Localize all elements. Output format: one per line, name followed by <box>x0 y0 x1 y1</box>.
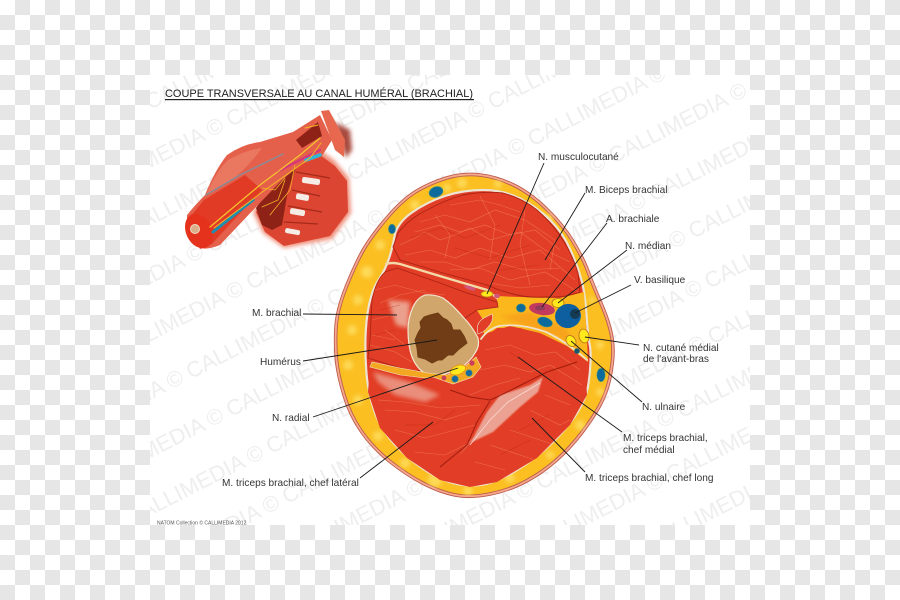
fascia band between biceps and brachial <box>386 263 497 298</box>
watermark: CALLIMEDIA © CALLIMEDIA © <box>521 395 808 558</box>
deep fascia <box>365 190 591 486</box>
title: COUPE TRANSVERSALE AU CANAL HUMÉRAL (BRACHIAL) <box>165 87 473 100</box>
muscle: biceps brachial <box>393 192 580 297</box>
label: N. ulnaire: N. ulnaire <box>642 402 686 413</box>
vessels and nerves <box>206 125 321 232</box>
label: N. musculocutané: N. musculocutané <box>538 152 619 163</box>
credit line: NATOM Collection © CALLIMEDIA 2012 <box>157 520 247 526</box>
watermark: CALLIMEDIA © CALLIMEDIA © CALLIMEDIA © CALLIMEDIA © CALLIMEDIA © <box>121 152 831 530</box>
watermark: CALLIMEDIA © CALLIMEDIA © CALLIMEDIA © CALLIMEDIA © CALLIMEDIA © <box>41 77 751 455</box>
watermark: CALLIMEDIA © CALLIMEDIA © CALLIMEDIA © CALLIMEDIA © CALLIMEDIA © <box>137 202 847 580</box>
label: M. triceps brachial, chef latéral: M. triceps brachial, chef latéral <box>222 478 359 489</box>
superficial veins <box>389 185 605 382</box>
label: M. brachial: M. brachial <box>252 308 301 319</box>
upper arm <box>180 115 332 253</box>
cross-section of the arm <box>336 174 613 496</box>
radial nerve bundle <box>370 357 481 384</box>
label: M. triceps brachial, chef long: M. triceps brachial, chef long <box>585 473 713 484</box>
inset: arm and chest dissection <box>180 110 352 253</box>
watermark: CALLIMEDIA © CALLIMEDIA © CALLIMEDIA © CALLIMEDIA © <box>61 23 630 329</box>
watermark: CALLIMEDIA © <box>141 23 288 114</box>
white panel <box>150 75 750 525</box>
neurovascular structures <box>516 298 590 354</box>
watermark: CALLIMEDIA © CALLIMEDIA © CALLIMEDIA © <box>391 332 819 566</box>
watermark: CALLIMEDIA © CALLIMEDIA © CALLIMEDIA © CALLIMEDIA © CALLIMEDIA © <box>81 115 791 493</box>
watermark: CALLIMEDIA © <box>641 464 788 555</box>
muscle: small anterior slip <box>477 314 493 334</box>
subcutaneous fat lobules <box>343 178 604 496</box>
fascia band above triceps <box>481 325 587 360</box>
watermark: CALLIMEDIA © CALLIMEDIA © CALLIMEDIA © <box>121 6 549 240</box>
label: M. triceps brachial, chef médial: chef médial <box>623 445 675 456</box>
label: N. cutané médial de l'avant-bras: de l'avant-bras <box>643 354 709 365</box>
label: M. Biceps brachial: M. Biceps brachial <box>585 185 667 196</box>
neurovascular compartment fat <box>476 292 588 362</box>
label: N. radial: N. radial <box>272 413 310 424</box>
chest wall <box>253 150 351 248</box>
label: N. cutané médial de l'avant-bras: N. cutané médial <box>643 343 719 354</box>
watermark: CALLIMEDIA © CALLIMEDIA © CALLIMEDIA © CALLIMEDIA © <box>281 258 850 564</box>
bone marrow <box>415 313 467 363</box>
humerus <box>408 295 479 376</box>
ribs <box>285 177 320 235</box>
label: A. brachiale: A. brachiale <box>606 214 660 225</box>
watermark: CALLIMEDIA © CALLIMEDIA © <box>81 40 368 203</box>
label: Humérus: Humérus <box>260 357 301 368</box>
label: M. triceps brachial, chef médial: M. triceps brachial, <box>623 433 708 444</box>
intermuscular septa <box>450 362 577 400</box>
muscle: brachial <box>368 268 498 372</box>
muscle: triceps brachial <box>368 328 587 487</box>
skin outline <box>336 174 613 496</box>
watermark: CALLIMEDIA © CALLIMEDIA © CALLIMEDIA © CALLIMEDIA © <box>101 60 670 366</box>
leader lines <box>303 163 642 478</box>
musculocutaneous nerve <box>464 284 500 298</box>
label: V. basilique: V. basilique <box>634 275 686 286</box>
pectoral flap <box>321 110 352 158</box>
label: N. médian: N. médian <box>625 241 671 252</box>
